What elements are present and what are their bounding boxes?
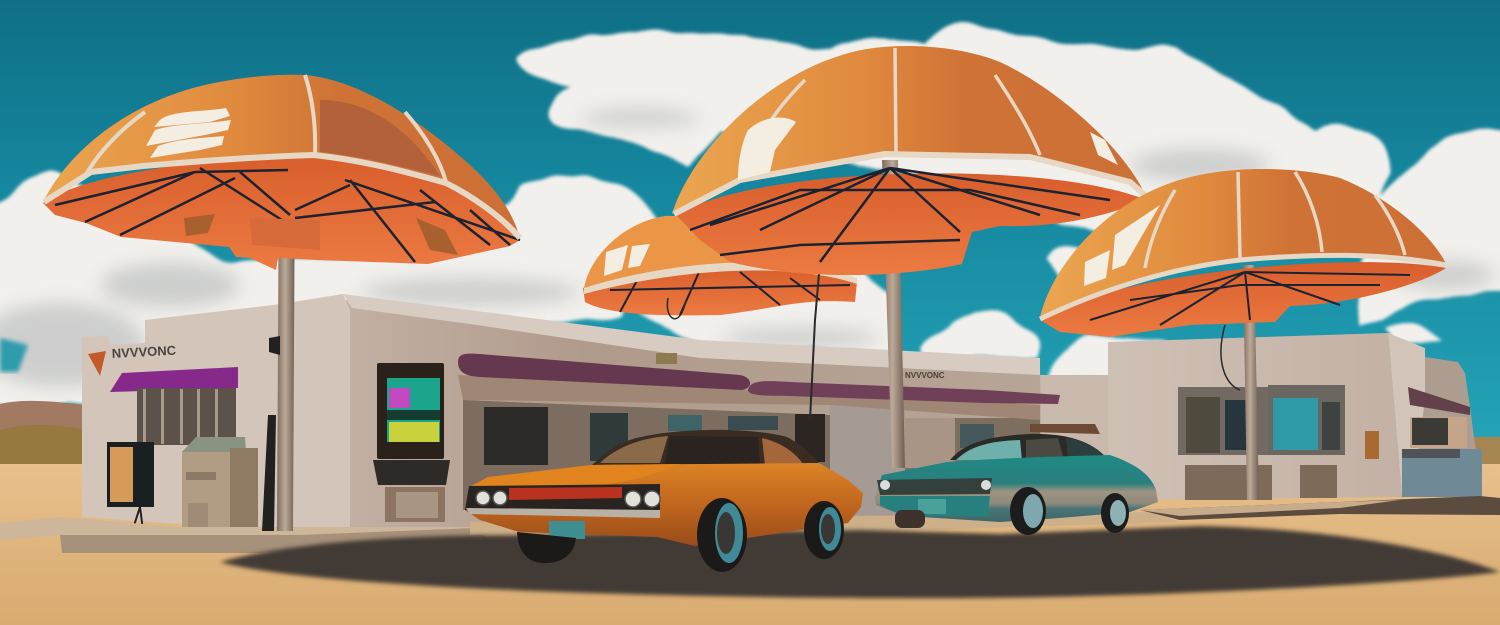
teal car (875, 424, 1158, 535)
centre umbrella pole (882, 160, 905, 468)
small umbrella canopy (584, 216, 857, 292)
cloud: right bank (1360, 130, 1500, 325)
orange car grille (465, 484, 660, 518)
cloud: far right wisp (1385, 326, 1440, 345)
cloud: small wisp (1045, 246, 1085, 282)
kiosk base (373, 460, 450, 522)
pavement slab (0, 517, 490, 553)
centre umbrella small logo (1090, 132, 1118, 165)
purple awning left (110, 367, 238, 392)
sign right: NVVVONC (905, 371, 945, 380)
left umbrella pole (277, 160, 295, 531)
hanging right cable (1221, 325, 1240, 390)
umbrella: centre large (672, 46, 1146, 468)
centre umbrella canopy (672, 46, 1146, 214)
pavement centre (470, 512, 1180, 535)
left umbrella seams (44, 75, 520, 238)
cloud: middle lower (640, 272, 895, 352)
cloud: upper centre (520, 24, 1392, 232)
pavement right light strip (1140, 500, 1400, 516)
small umbrella underside (583, 265, 857, 315)
hanging nozzle cable (810, 262, 820, 420)
right building side fixture (1365, 431, 1379, 459)
orange car (465, 430, 863, 572)
hanging loop cable (667, 298, 686, 319)
cloud: left bank (0, 171, 665, 405)
storefront recess (463, 400, 830, 510)
right building screen window (1268, 385, 1345, 455)
orange car headlights (476, 491, 660, 507)
right umbrella ribs (1090, 272, 1410, 325)
cloud shading (0, 109, 1495, 387)
purple awning right (748, 381, 1060, 404)
small umbrella logo (604, 244, 650, 276)
teal car headlights (880, 480, 991, 490)
right building lower panel (1402, 449, 1482, 497)
left umbrella canopy (44, 75, 520, 238)
right building (1040, 333, 1482, 510)
main building (82, 294, 1060, 538)
right umbrella underside (1040, 262, 1446, 337)
desert mountains (0, 401, 85, 470)
left umbrella centre panel (250, 218, 320, 250)
sign text: NVVVONC (111, 343, 177, 361)
benches (1185, 465, 1337, 500)
pavement right (1140, 496, 1500, 520)
umbrella: left (43, 75, 520, 531)
right building window left (1178, 387, 1268, 455)
centre umbrella logo (738, 117, 796, 180)
info board (107, 442, 154, 538)
orange car plate (549, 521, 585, 539)
desert hill right (1470, 437, 1500, 465)
clouds (0, 24, 1500, 405)
right shop windows (960, 424, 994, 448)
left umbrella underside (43, 155, 520, 270)
lower awning shadow (458, 375, 1040, 420)
teal car plate (918, 499, 946, 514)
centre umbrella seams (674, 48, 1146, 214)
cloud: small centre right (918, 309, 1041, 358)
left umbrella pole fittings (262, 336, 280, 531)
centre umbrella ribs (690, 168, 1110, 262)
teal car grille (877, 478, 992, 495)
ground shadow (220, 526, 1500, 598)
purple awning long (458, 354, 750, 390)
fuel pump (182, 437, 258, 531)
left umbrella ribs (55, 168, 520, 262)
left umbrella shaded panel (320, 100, 440, 176)
right storefront pillar (905, 418, 955, 468)
right building awning (1408, 387, 1470, 415)
right umbrella canopy (1040, 169, 1446, 318)
roof lip (343, 294, 1040, 375)
cloud: behind right building (1050, 334, 1165, 380)
umbrella: small centre (583, 216, 857, 420)
centre umbrella underside (676, 173, 1146, 275)
left wing wall (82, 294, 350, 530)
right storefront recess (905, 418, 1040, 515)
left window (137, 388, 236, 445)
right umbrella seams (1040, 172, 1446, 319)
sky patch: lower left (0, 338, 28, 372)
desert hill left (0, 425, 85, 468)
umbrella: right (1040, 169, 1446, 500)
right umbrella logo (1084, 205, 1160, 286)
left umbrella vents (184, 214, 458, 255)
sign small (656, 353, 677, 364)
sign logo (88, 351, 106, 376)
shop windows (484, 407, 825, 465)
teal car wheels (895, 487, 1129, 535)
right umbrella pole (1243, 265, 1259, 500)
left umbrella logo (146, 108, 231, 158)
right building small window (1410, 417, 1467, 448)
digital kiosk screen (377, 363, 444, 459)
orange car wheels (517, 498, 844, 572)
sand ground (0, 464, 1500, 625)
wall panel beside recess (830, 405, 905, 515)
